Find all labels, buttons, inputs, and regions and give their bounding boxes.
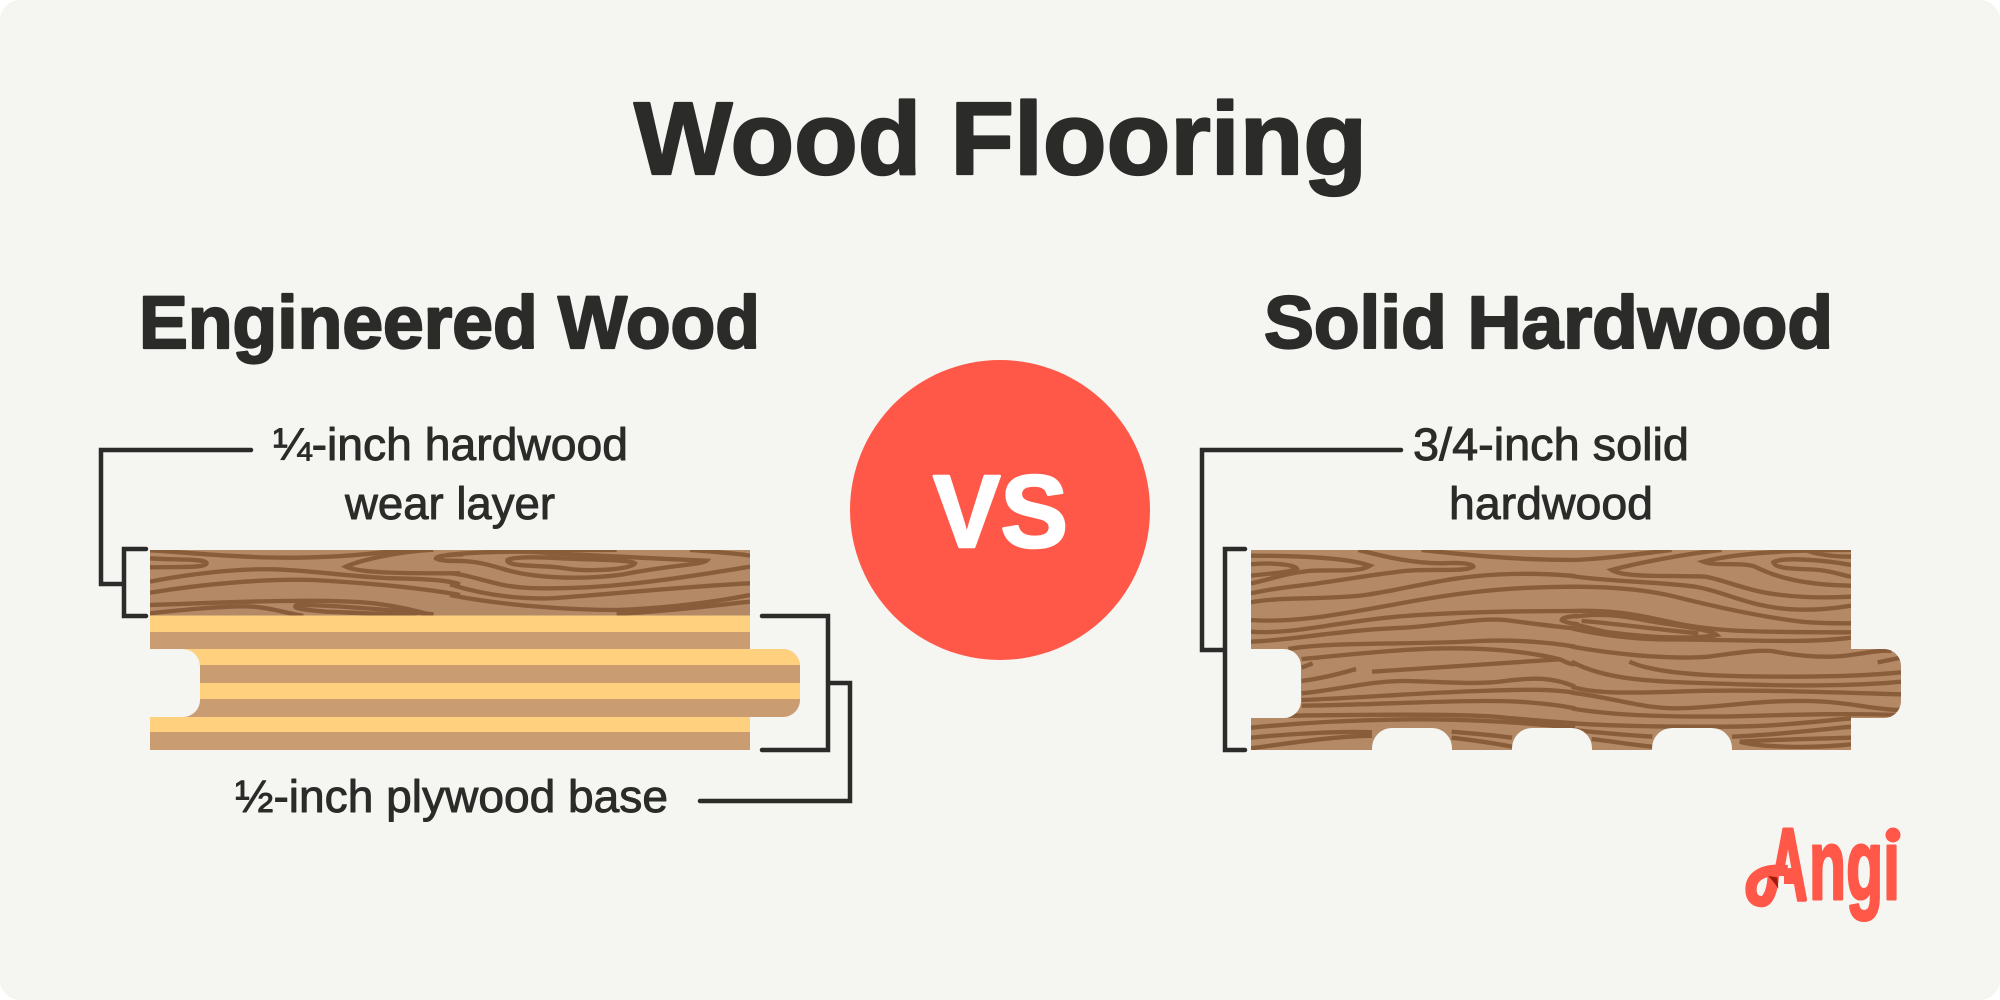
plywood base layers — [150, 615, 810, 750]
label: wear layer: wear layer — [344, 478, 555, 529]
leader bracket: wear layer — [101, 450, 251, 616]
Angi logo — [1745, 828, 1900, 922]
heading: engineered wood: Engineered Wood — [139, 281, 760, 364]
heading: solid hardwood: Solid Hardwood — [1264, 281, 1833, 364]
title: Wood Flooring — [634, 81, 1367, 196]
VS badge — [850, 360, 1150, 660]
label: wear layer — [273, 419, 628, 529]
label: wear layer: ¼-inch hardwood — [273, 419, 628, 470]
label: solid hardwood — [1413, 419, 1689, 529]
leader bracket: solid hardwood — [1202, 450, 1401, 750]
Angi logo: A — [1769, 809, 1807, 921]
label: plywood base: ½-inch plywood base — [235, 771, 668, 822]
Angi logo: ngi — [1809, 809, 1900, 921]
leader bracket: plywood base — [700, 616, 850, 801]
engineered plank diagram — [150, 549, 810, 750]
VS badge: VS — [933, 454, 1068, 569]
solid hardwood plank diagram — [1251, 550, 1901, 750]
hardwood wear layer — [150, 549, 750, 616]
label: solid hardwood: hardwood — [1449, 478, 1653, 529]
label: solid hardwood: 3/4-inch solid — [1413, 419, 1689, 470]
